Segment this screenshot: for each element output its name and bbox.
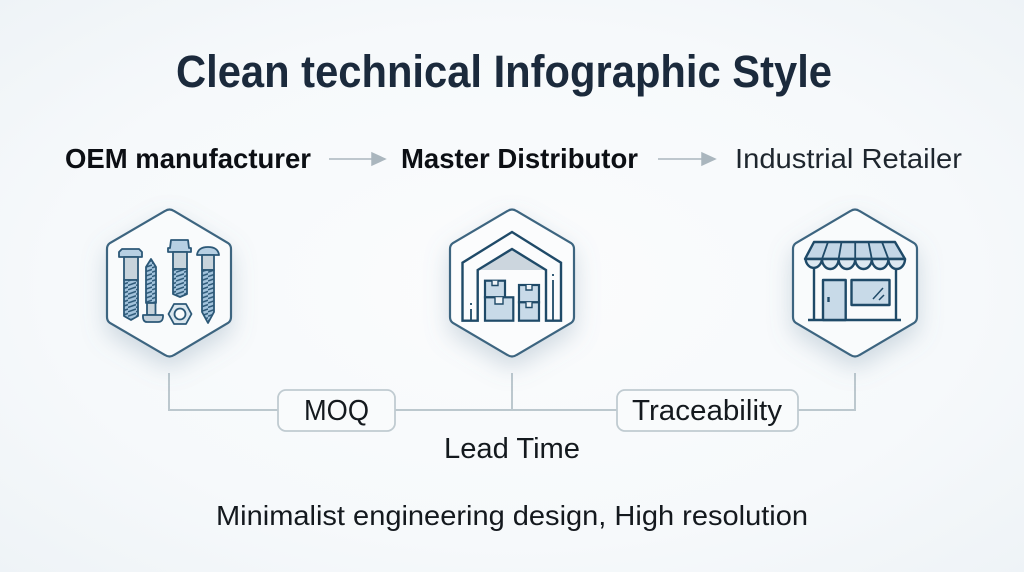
label: Traceability: Traceability [632, 395, 783, 427]
building posts and ground [808, 265, 901, 320]
awning scallops [806, 259, 905, 269]
step: OEM manufacturer: OEM manufacturer [65, 143, 311, 174]
process flow heading [65, 143, 962, 174]
label: MOQ [278, 390, 395, 431]
footer caption: Minimalist engineering design, High resolution [216, 500, 808, 531]
gable fill [478, 249, 546, 270]
flange bolt [168, 240, 191, 297]
label: MOQ: MOQ [304, 395, 369, 427]
boxes [485, 281, 539, 321]
icon: fasteners hexagon [107, 210, 231, 356]
window [852, 280, 890, 305]
icon: warehouse hexagon [450, 210, 574, 356]
icon: storefront hexagon [793, 210, 917, 356]
small wall marks [471, 274, 553, 320]
step: Master Distributor: Master Distributor [401, 143, 638, 174]
arrow: OEM to distributor [329, 153, 385, 165]
warehouse outline [462, 232, 561, 321]
lag screw [143, 259, 163, 322]
title: Clean technical Infographic Style [176, 46, 832, 97]
hex nut [168, 304, 192, 324]
round head screw [197, 247, 219, 323]
arrow: distributor to retailer [658, 153, 715, 165]
awning [805, 242, 905, 259]
hex bolt [119, 249, 142, 320]
door [823, 280, 846, 320]
label: Lead Time: Lead Time [444, 433, 580, 465]
connector lines [169, 373, 855, 410]
label: Traceability [617, 390, 798, 431]
step: Industrial Retailer: Industrial Retailer [735, 143, 962, 174]
